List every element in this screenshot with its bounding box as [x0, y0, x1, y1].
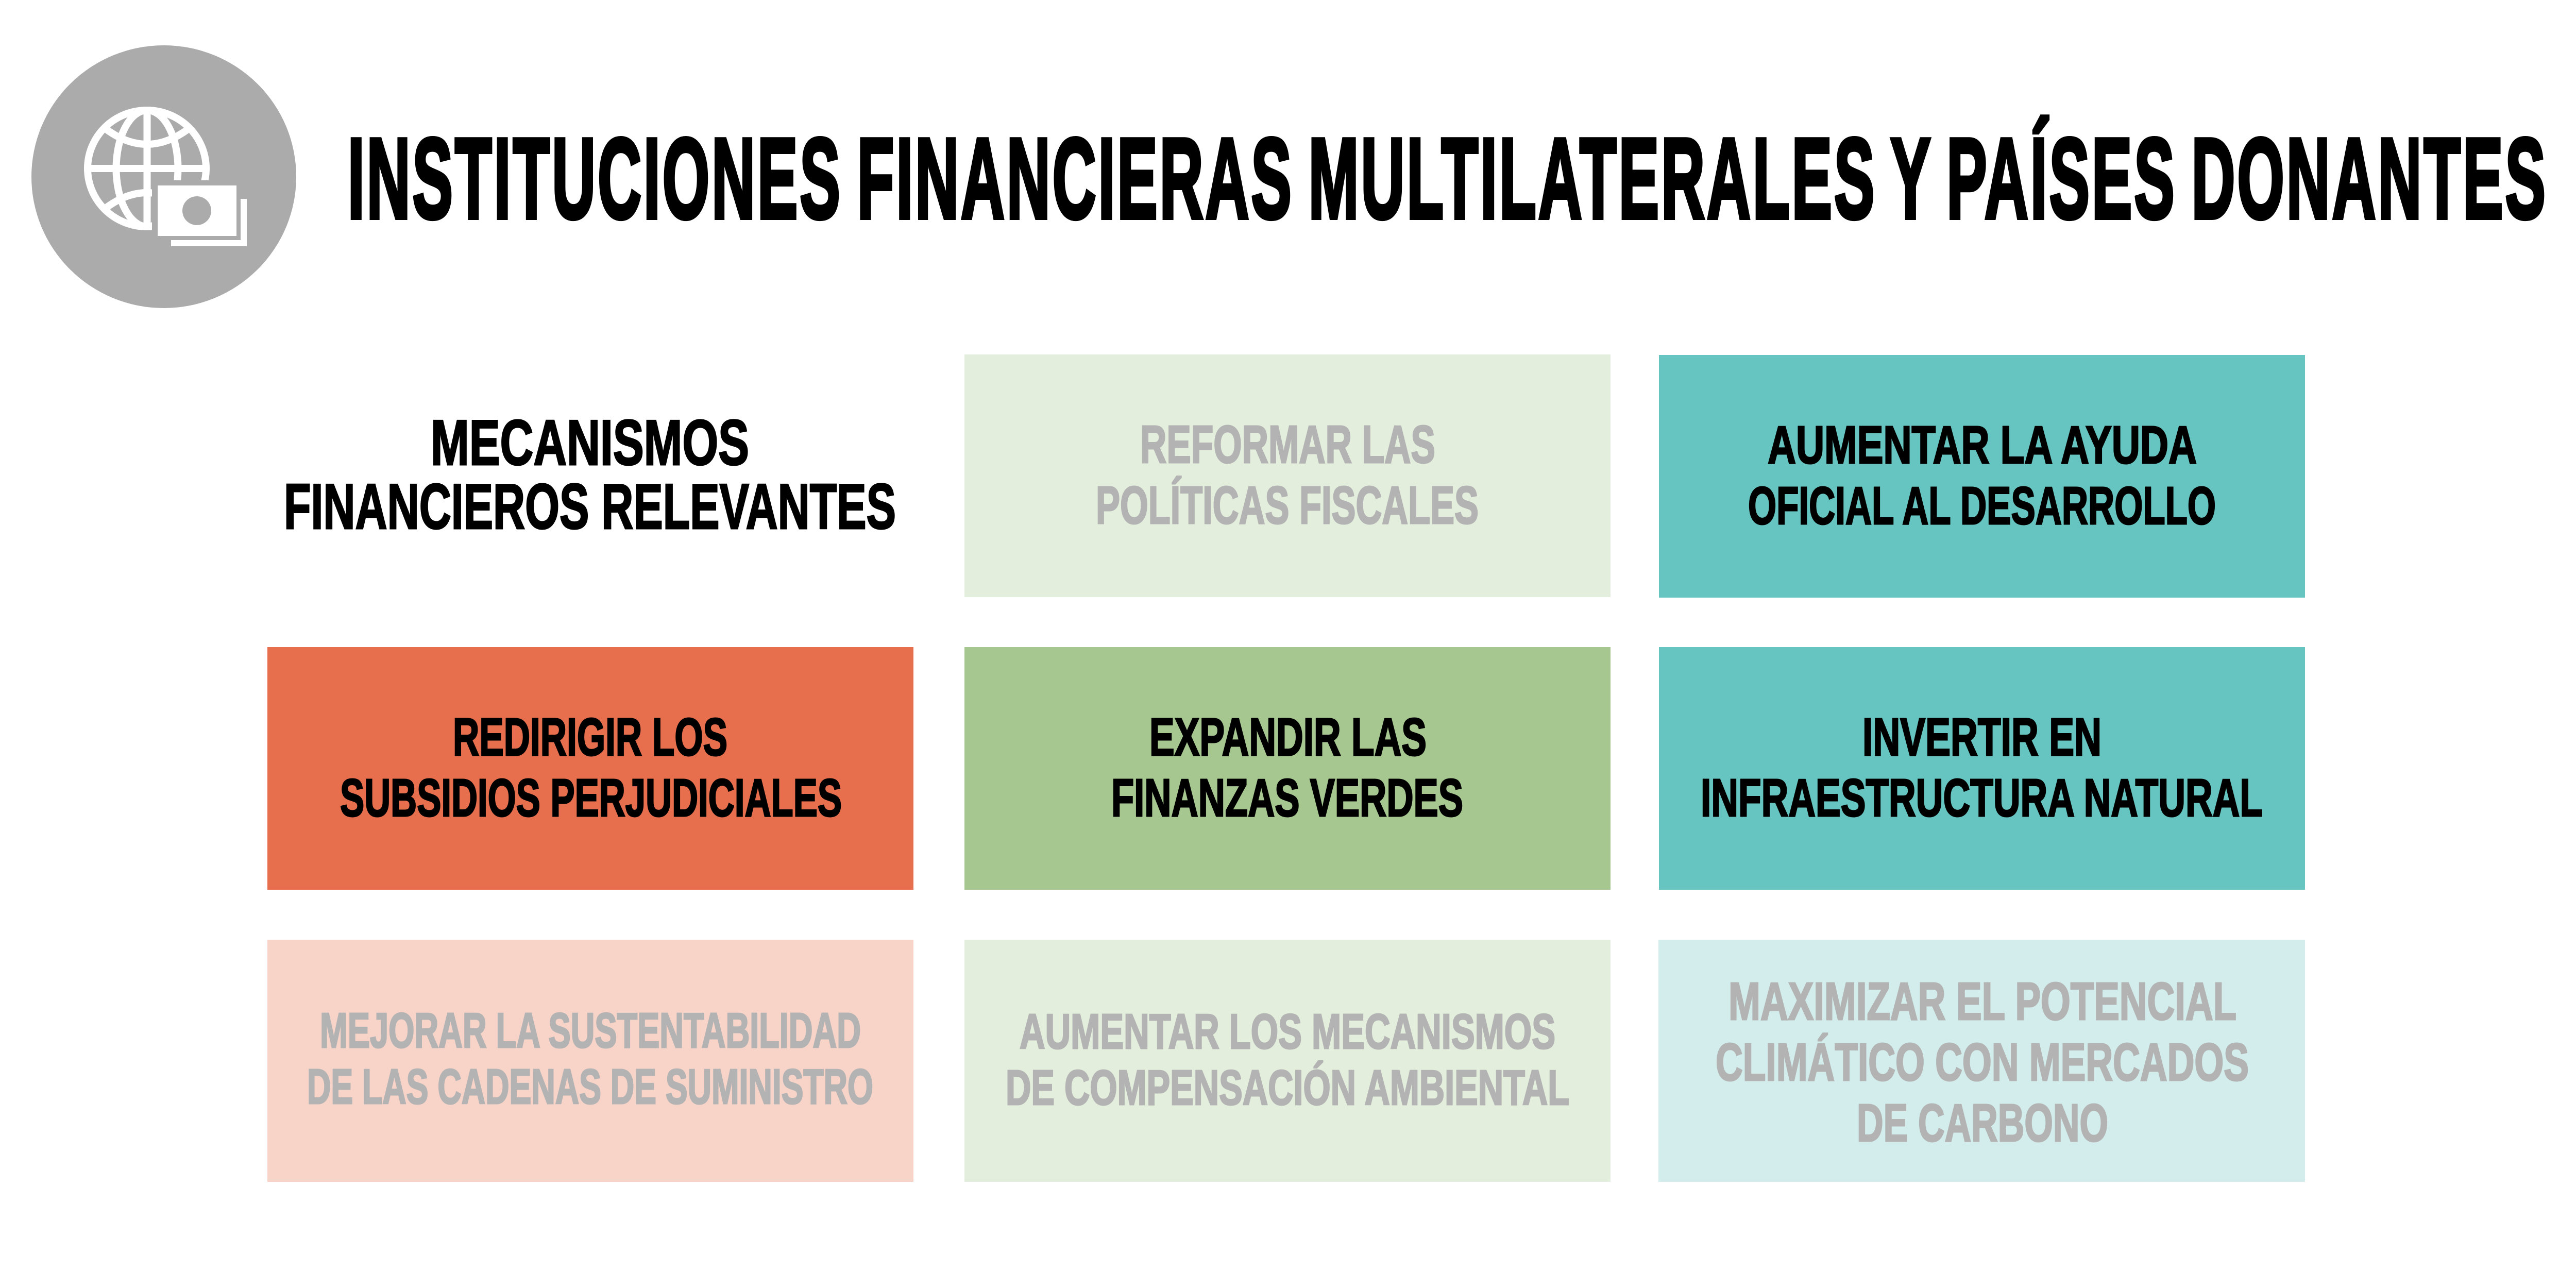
label line 2: SUBSIDIOS PERJUDICIALES: [340, 768, 842, 827]
label line 1: INVERTIR EN: [1862, 707, 2102, 767]
icon: banknote: [158, 185, 236, 236]
panel: expandir las finanzas verdes: [964, 647, 1611, 890]
heading line 1: MECANISMOS: [431, 408, 749, 479]
label line 2: DE LAS CADENAS DE SUMINISTRO: [307, 1059, 873, 1114]
label line 2: DE COMPENSACIÓN AMBIENTAL: [1006, 1060, 1569, 1115]
box: [964, 940, 1611, 1182]
box: [1658, 940, 2305, 1182]
label line 1: EXPANDIR LAS: [1149, 707, 1427, 767]
label line 3: DE CARBONO: [1857, 1093, 2108, 1152]
icon: globe: [88, 107, 206, 230]
box: [267, 940, 913, 1182]
heading line 2: FINANCIEROS RELEVANTES: [284, 471, 896, 542]
label line 1: REFORMAR LAS: [1140, 415, 1435, 474]
label line 2: OFICIAL AL DESARROLLO: [1748, 476, 2216, 535]
label line 1: AUMENTAR LA AYUDA: [1768, 415, 2197, 474]
panel: invertir en infraestructura natural: [1659, 647, 2305, 890]
icon: banknote behind: [171, 199, 247, 246]
panel: maximizar el potencial: [1658, 940, 2305, 1182]
label line 2: INFRAESTRUCTURA NATURAL: [1701, 768, 2263, 827]
label line 2: POLÍTICAS FISCALES: [1096, 476, 1479, 535]
box: [964, 647, 1611, 890]
icon background circle: [31, 45, 296, 308]
label line 1: AUMENTAR LOS MECANISMOS: [1020, 1004, 1555, 1059]
box: [964, 354, 1611, 597]
box: [267, 647, 913, 890]
panel: redirigir los subsidios: [267, 647, 913, 890]
icon: globe with banknotes in grey circle: [31, 45, 296, 308]
panel: heading mecanismos: [284, 408, 896, 542]
panel: aumentar los mecanismos: [964, 940, 1611, 1182]
label line 1: MAXIMIZAR EL POTENCIAL: [1728, 972, 2236, 1031]
panel: mejorar la sustentabilidad: [267, 940, 913, 1182]
panel: reformar las políticas fiscales: [964, 354, 1611, 597]
box: [1659, 355, 2305, 598]
label line 1: MEJORAR LA SUSTENTABILIDAD: [320, 1003, 861, 1058]
label line 1: REDIRIGIR LOS: [453, 707, 727, 767]
label line 2: FINANZAS VERDES: [1111, 768, 1463, 827]
panel: aumentar la ayuda oficial: [1659, 355, 2305, 598]
box: [1659, 647, 2305, 890]
label line 2: CLIMÁTICO CON MERCADOS: [1716, 1032, 2249, 1092]
